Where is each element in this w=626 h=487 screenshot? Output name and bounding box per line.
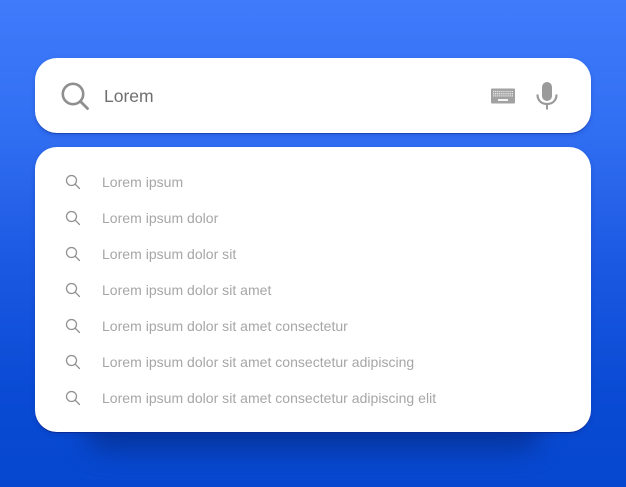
suggestion 2: Lorem ipsum dolor bbox=[102, 210, 218, 226]
search query text: Lorem bbox=[104, 86, 154, 106]
icon: microphone bbox=[536, 82, 558, 110]
icon: search bbox=[62, 82, 89, 110]
suggestion 1: Lorem ipsum bbox=[102, 174, 183, 190]
suggestion 6: Lorem ipsum dolor sit amet consectetur adipiscing bbox=[102, 354, 414, 370]
suggestion 4: Lorem ipsum dolor sit amet bbox=[102, 282, 271, 298]
icon: keyboard bbox=[491, 88, 515, 104]
search bar bbox=[35, 58, 591, 133]
suggestion 3: Lorem ipsum dolor sit bbox=[102, 246, 236, 262]
panel: suggestions bbox=[35, 147, 591, 432]
suggestion 5: Lorem ipsum dolor sit amet consectetur bbox=[102, 318, 348, 334]
suggestion 7: Lorem ipsum dolor sit amet consectetur adipiscing elit bbox=[102, 390, 436, 406]
panel shadow bbox=[85, 412, 541, 450]
suggestion 1 bbox=[66, 174, 183, 190]
